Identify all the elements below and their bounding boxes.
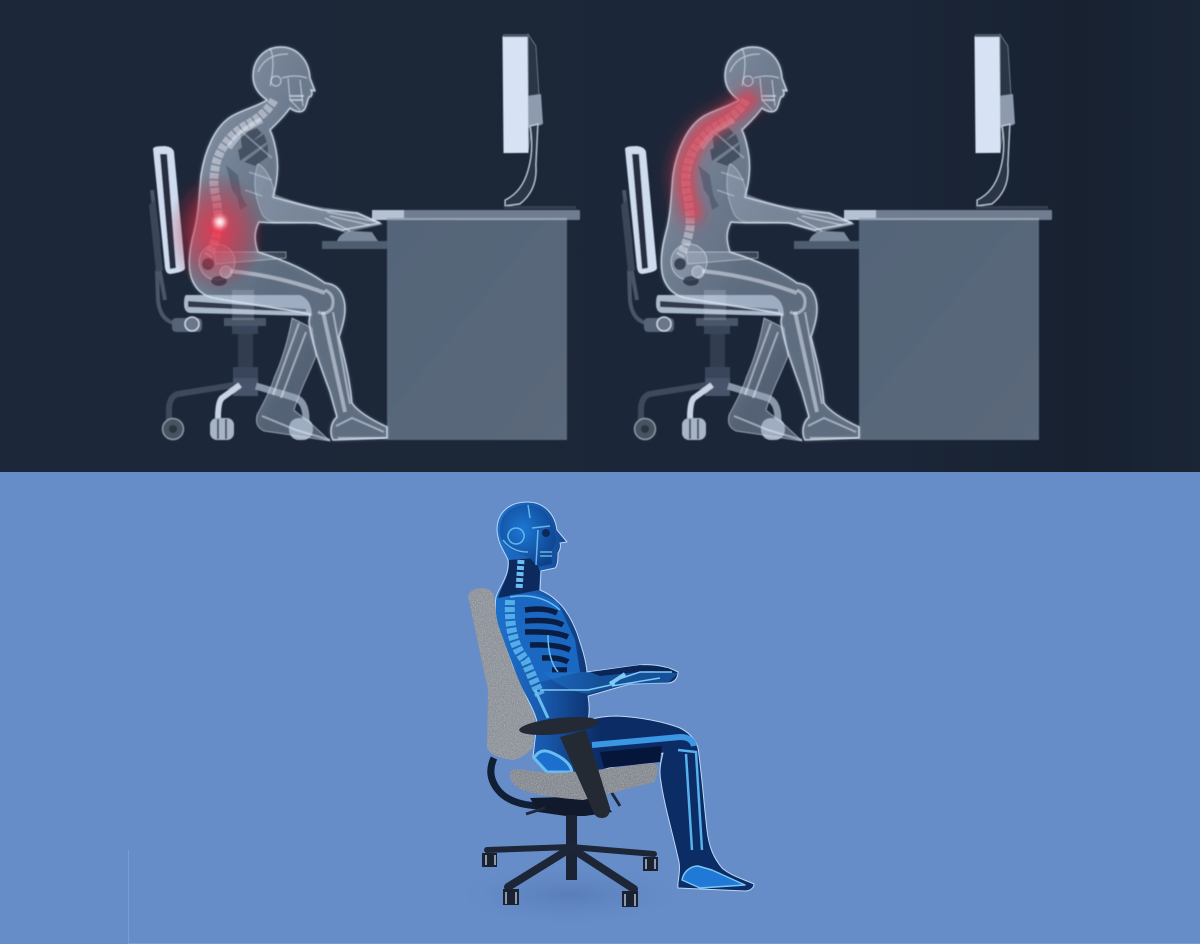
chair seat: [510, 763, 658, 800]
arm: [540, 665, 678, 694]
star base: [482, 847, 658, 907]
armrest support: [560, 730, 610, 818]
femur: [592, 737, 694, 746]
neck vertebrae: [519, 560, 521, 590]
scene: lower back pain: [149, 34, 580, 441]
scene: correct posture in ergonomic chair: [460, 502, 754, 925]
scene: neck and upper back pain: [621, 34, 1052, 441]
red glow: neck and thoracic spine: [682, 98, 750, 215]
foot bones: [682, 866, 745, 888]
background: blue lower band: [0, 472, 1200, 944]
chair frame: [491, 758, 566, 808]
chair back: [468, 588, 535, 760]
lumbar and pelvis: [534, 690, 572, 772]
lower leg bones: [678, 750, 702, 850]
floor shadow: [460, 865, 680, 925]
chair mechanism: [530, 796, 612, 816]
gas column: [566, 815, 577, 880]
blue x-ray body: [495, 502, 754, 891]
background: dark upper band: [0, 0, 1200, 472]
thigh underside: [600, 746, 662, 768]
red glow: lumbar spine: [167, 172, 267, 292]
neck: [498, 558, 540, 598]
skull: [500, 505, 556, 567]
armrest pad: [518, 714, 600, 738]
rib cage: [510, 594, 580, 695]
